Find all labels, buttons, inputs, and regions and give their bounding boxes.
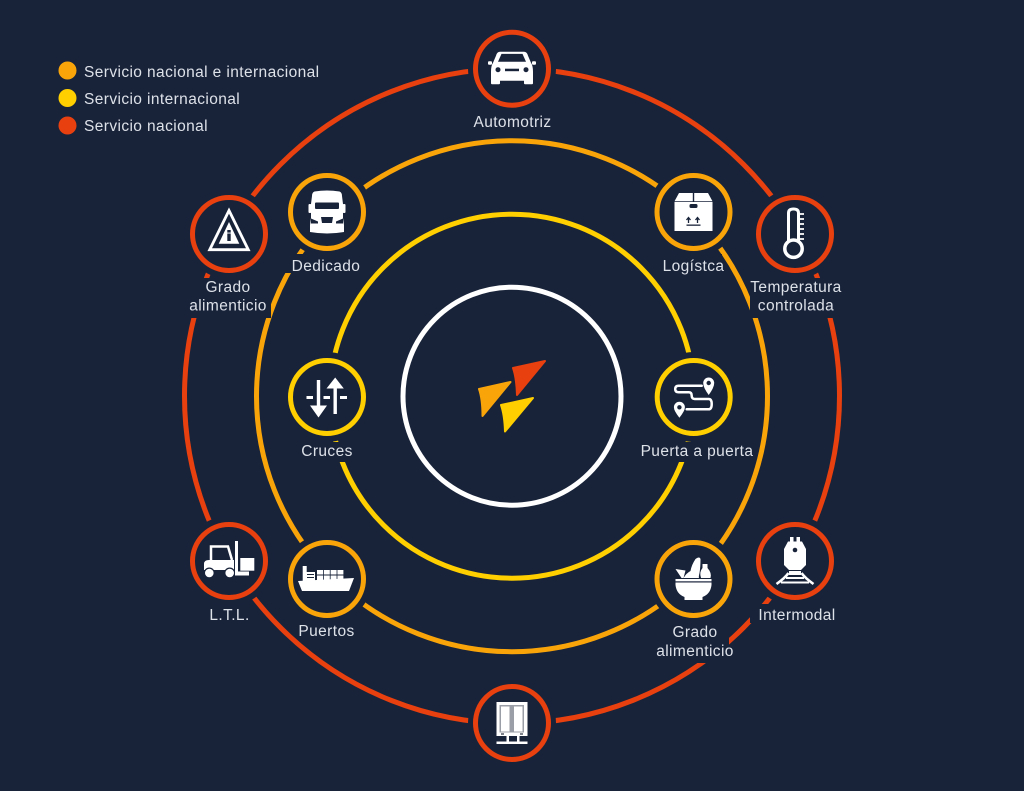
node: Temperatura controlada xyxy=(750,189,842,318)
icon: car xyxy=(488,52,536,84)
label: Cruces: Cruces xyxy=(301,443,353,460)
node: Grado alimenticio (outer) xyxy=(184,189,274,318)
label: Puerta a puerta: Puerta a puerta xyxy=(641,443,753,460)
node: Grado alimenticio (middle): alimenticio xyxy=(656,643,734,660)
label: L.T.L.: L.T.L. xyxy=(209,607,250,624)
node: Grado alimenticio (middle) xyxy=(648,534,738,663)
icon: forklift xyxy=(204,541,254,578)
icon: box xyxy=(674,193,712,231)
legend xyxy=(58,62,320,135)
center white ring xyxy=(403,287,621,505)
node: Temperatura controlada: controlada xyxy=(758,298,834,314)
icon: trailer xyxy=(496,702,528,744)
node: Dedicado xyxy=(282,167,372,275)
node: Puertos xyxy=(282,534,372,640)
icon: route with pins xyxy=(674,378,714,418)
label: Intermodal: Intermodal xyxy=(758,607,836,624)
icon: opposing arrows xyxy=(306,378,347,418)
icon: warning triangle xyxy=(210,210,248,250)
label: Logístca: Logístca xyxy=(663,258,724,275)
icon: train xyxy=(776,537,814,584)
legend: Servicio internacional xyxy=(84,91,240,108)
inner ring: international service xyxy=(330,214,694,578)
node: Intermodal xyxy=(750,516,840,624)
label: Grado alimenticio: Grado xyxy=(205,279,251,296)
node: Cruces xyxy=(282,352,372,462)
middle ring: national and international service xyxy=(256,141,768,652)
node: trailer without label xyxy=(468,679,556,767)
icon: food bowl xyxy=(676,558,712,600)
label: Dedicado: Dedicado xyxy=(292,258,360,275)
node: Automotriz xyxy=(468,25,556,131)
icon: truck xyxy=(308,190,346,234)
legend: Servicio nacional e internacional xyxy=(84,64,320,81)
icon: cargo ship xyxy=(298,566,354,591)
node: Grado alimenticio (outer): alimenticio xyxy=(189,298,267,314)
label: Temperatura controlada: Temperatura xyxy=(750,279,842,296)
label: Puertos: Puertos xyxy=(298,623,355,640)
label: Grado alimenticio: Grado xyxy=(672,624,718,641)
outer ring: national service xyxy=(184,68,840,724)
label: Automotriz: Automotriz xyxy=(473,114,552,131)
legend: Servicio nacional xyxy=(84,118,208,135)
node: Puerta a puerta xyxy=(640,352,754,462)
center logo xyxy=(479,361,545,432)
node: L.T.L. xyxy=(184,516,274,624)
icon: thermometer xyxy=(785,209,804,257)
node: Logística xyxy=(648,167,738,275)
